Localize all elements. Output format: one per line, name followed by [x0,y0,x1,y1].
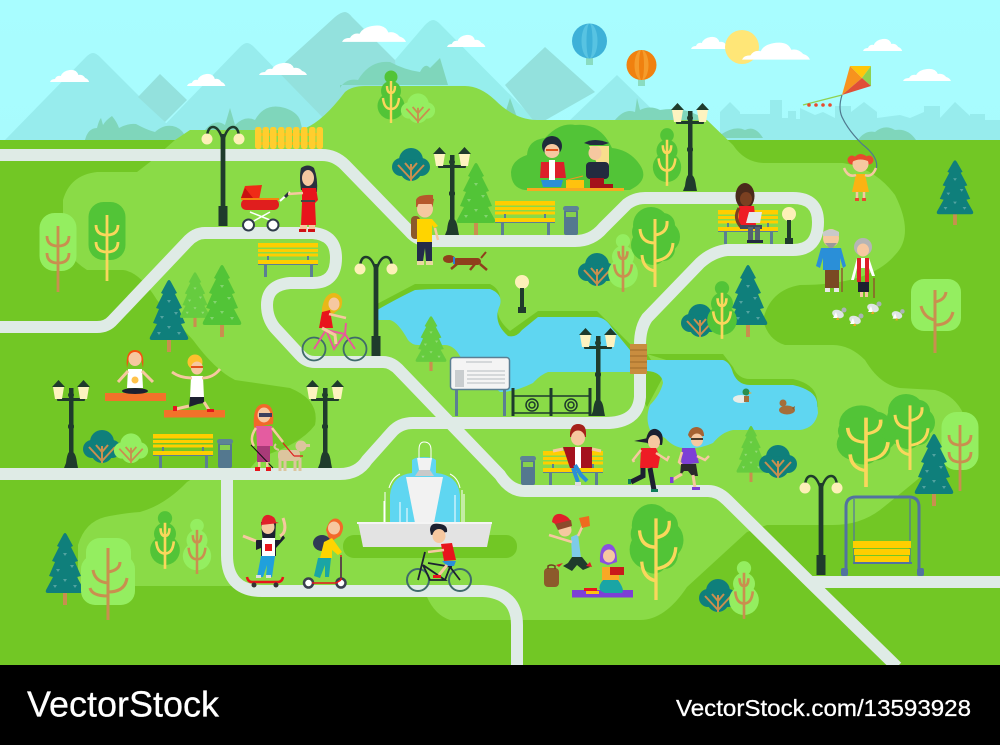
girl flying kite [844,154,876,201]
boy on bicycle [407,524,471,591]
square tree right [911,279,961,353]
city skyline [720,100,1000,140]
ducks [733,388,795,414]
dachshund dog [443,252,487,270]
fountain [357,442,492,547]
picnic couple [527,136,624,191]
notice board [450,358,510,416]
ground: fountain lawn strip [343,535,517,558]
benches [153,201,778,485]
watermark logo: VectorStock [27,684,220,724]
boy with backpack [411,195,438,265]
background sky [0,0,1000,140]
ground: lake rim [377,284,818,407]
street lamps [52,103,842,575]
trees [40,70,978,620]
elderly couple [816,229,875,298]
ground: dark green base [0,140,1000,665]
small garden lamps [515,207,796,313]
sun [725,30,810,64]
lake [377,289,818,448]
watermark url: VectorStock.com/13593928 [676,695,971,721]
girl cycling pink bike [302,293,366,360]
swing [841,497,924,576]
jogging man [670,427,709,490]
man sitting on bench [553,424,601,486]
blind woman with guide dog [251,404,310,471]
mountains [5,12,665,140]
pigeons [831,302,905,326]
wooden bridge [630,344,647,374]
woman with red stroller [241,166,318,232]
ground: light green park area [63,86,966,620]
jogging woman [628,429,669,492]
skateboarder [243,515,285,588]
girl reading on mat [572,544,633,598]
blob tree lower left [81,538,135,620]
girl on kick scooter [304,518,346,588]
backpack [544,565,559,587]
footpaths [0,155,1000,667]
distant tree silhouettes [85,58,916,140]
tent of bushes behind picnic [511,125,643,190]
hot air balloon: blue [572,24,607,65]
iron railing [513,388,590,416]
trash bins [217,206,579,485]
fence [255,127,323,149]
footer bar [0,665,1000,745]
yoga woman lunging [164,354,225,418]
hot air balloon: orange [626,50,656,86]
woman with laptop on bench [736,183,763,243]
jumping boy [549,514,592,571]
yoga woman meditating [105,350,166,401]
kite [803,66,877,170]
clouds [50,26,951,86]
